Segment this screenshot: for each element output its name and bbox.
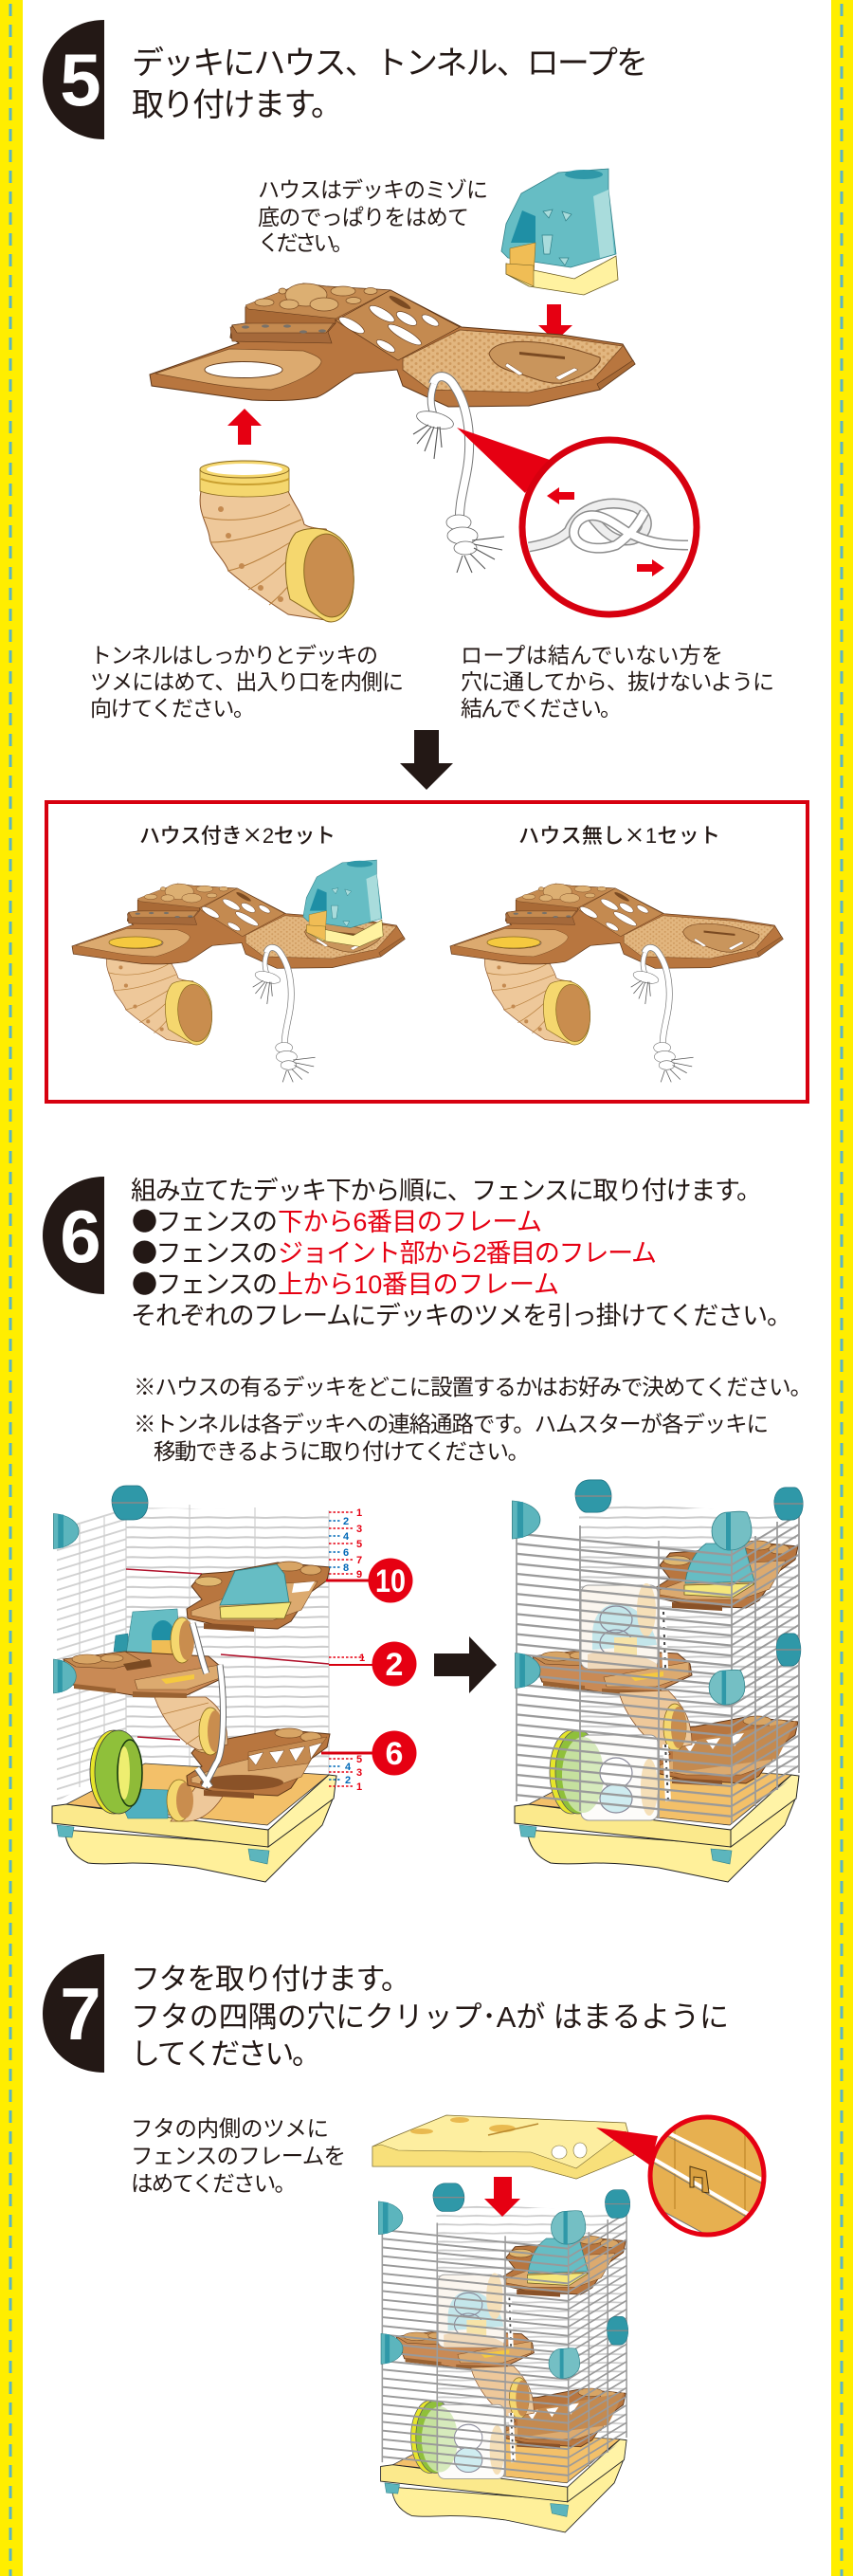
panel: assembled deck sets bbox=[46, 802, 808, 1102]
lower deck bbox=[187, 1728, 330, 1799]
frame number ticks upper: 9 bbox=[356, 1569, 362, 1580]
step 7 number badge bbox=[43, 1954, 104, 2073]
tunnel instruction text: トンネルはしっかりとデッキの bbox=[90, 643, 378, 667]
notes: ※トンネルは各デッキへの連絡通路です。ハムスターが各デッキに bbox=[134, 1412, 769, 1436]
upper tunnel mouth bbox=[171, 1617, 194, 1663]
deck set without house bbox=[450, 884, 783, 1082]
middle level house bbox=[114, 1609, 180, 1659]
step 5 number badge bbox=[43, 20, 104, 139]
icon: house bbox=[501, 169, 618, 295]
cage diagram: before bbox=[52, 1486, 417, 1882]
arrow: red down to cage bbox=[484, 2177, 520, 2217]
frame number ticks upper: 3 bbox=[356, 1524, 362, 1535]
ropes highlight bbox=[192, 1623, 223, 1787]
right dashed yellow border bbox=[831, 0, 853, 2576]
frame number ticks upper: 1 bbox=[356, 1507, 362, 1519]
step 6 instructions: ジョイント部から2番目のフレーム bbox=[278, 1239, 657, 1268]
house instruction text: ください。 bbox=[258, 230, 354, 255]
frame number ticks upper: 2 bbox=[345, 1775, 351, 1786]
rope instruction text: ロープは結んでいない方を bbox=[461, 643, 723, 667]
fence back and side panels bbox=[57, 1505, 329, 1801]
step 5 heading: デッキにハウス、トンネル、ロープを bbox=[132, 46, 648, 82]
notes bbox=[134, 1375, 812, 1464]
badge: 10th frame bbox=[326, 1559, 413, 1602]
step 6 instructions: 組み立てたデッキ下から順に、フェンスに取り付けます。 bbox=[131, 1177, 762, 1205]
frame number ticks upper: 6 bbox=[343, 1547, 349, 1559]
step 7 heading: フタの四隅の穴にクリップ･Aが はまるように bbox=[131, 2001, 729, 2034]
deck illustration bbox=[150, 283, 635, 407]
notes: ※ハウスの有るデッキをどこに設置するかはお好みで決めてください。 bbox=[134, 1375, 812, 1399]
tunnel instruction text: ツメにはめて、出入り口を内側に bbox=[90, 669, 404, 694]
step 6 number badge: 6 bbox=[60, 1195, 101, 1278]
frame number ticks upper: 8 bbox=[343, 1562, 349, 1574]
ropes bbox=[192, 1623, 223, 1787]
house instruction text: ハウスはデッキのミゾに bbox=[258, 177, 488, 202]
frame number ticks upper: 4 bbox=[345, 1762, 352, 1773]
step 5 number badge: 5 bbox=[60, 38, 101, 121]
frame number ticks upper bbox=[329, 1507, 365, 1793]
step 6 instructions: ●フェンスの bbox=[132, 1201, 278, 1238]
step 6 instructions bbox=[131, 1177, 792, 1330]
lid illustration bbox=[372, 2115, 634, 2179]
top deck with house bbox=[187, 1562, 330, 1632]
step 7 heading: してください。 bbox=[131, 2037, 321, 2071]
frame number ticks upper: 5 bbox=[356, 1754, 362, 1765]
frame number ticks upper: 4 bbox=[343, 1531, 350, 1543]
frame number ticks upper: 7 bbox=[356, 1555, 362, 1566]
cage diagram: after bbox=[512, 1480, 803, 1882]
badge: 10th frame: 10 bbox=[375, 1563, 406, 1599]
badge: 2nd frame bbox=[329, 1642, 417, 1686]
step 6 instructions: 上から10番目のフレーム bbox=[278, 1270, 559, 1299]
step 7 number badge: 7 bbox=[60, 1972, 101, 2055]
badge: 6th frame bbox=[321, 1731, 417, 1775]
rope instruction text: 結んでください。 bbox=[461, 696, 622, 721]
frame number ticks upper: 1 bbox=[359, 1653, 365, 1664]
step 6 panel bbox=[43, 1177, 812, 1882]
house instruction text bbox=[258, 177, 488, 255]
lid instruction text bbox=[131, 2116, 346, 2196]
step 7 heading bbox=[131, 1963, 729, 2071]
lower tunnel bbox=[167, 1780, 227, 1821]
house instruction text: 底のでっぱりをはめて bbox=[258, 205, 469, 229]
step 6 instructions: ●フェンスの bbox=[132, 1233, 278, 1270]
base tray bbox=[52, 1763, 336, 1882]
callout: lid clip detail bbox=[596, 2114, 766, 2238]
tunnel instruction text bbox=[90, 643, 404, 721]
arrow: black down to result bbox=[400, 730, 453, 790]
middle deck bbox=[64, 1652, 223, 1698]
tunnel illustration bbox=[200, 461, 357, 622]
badge: 2nd frame: 2 bbox=[386, 1647, 403, 1683]
middle tunnel bbox=[154, 1697, 227, 1755]
deck set with house bbox=[72, 860, 405, 1082]
wheel and feeder bbox=[90, 1730, 168, 1818]
tunnel instruction text: 向けてください。 bbox=[90, 696, 255, 721]
step 6 number badge bbox=[43, 1177, 104, 1294]
rope instruction text bbox=[461, 643, 774, 721]
frame number ticks upper: 5 bbox=[356, 1539, 362, 1550]
frame marker lines bbox=[126, 1569, 329, 1740]
step 5 panel bbox=[43, 20, 774, 790]
callout: rope knot detail bbox=[457, 428, 697, 614]
step 7 heading: フタを取り付けます。 bbox=[131, 1963, 410, 1996]
label: with house: ハウス付き×2セット bbox=[139, 819, 336, 850]
rope illustration bbox=[413, 376, 504, 573]
step 6 instructions: 下から6番目のフレーム bbox=[278, 1208, 542, 1236]
left dashed yellow border bbox=[0, 0, 23, 2576]
arrow: red up from tunnel bbox=[227, 409, 262, 445]
rope instruction text: 穴に通してから、抜けないように bbox=[461, 669, 774, 694]
frame number ticks upper: 1 bbox=[356, 1781, 362, 1793]
step 6 instructions: それぞれのフレームにデッキのツメを引っ掛けてください。 bbox=[131, 1302, 792, 1330]
frame number ticks upper: 3 bbox=[356, 1767, 362, 1779]
label: without house: ハウス無し×1セット bbox=[518, 819, 720, 850]
arrow: red down to deck bbox=[538, 304, 572, 341]
frame number ticks upper: 2 bbox=[343, 1516, 349, 1527]
cage with lid being fitted bbox=[378, 2183, 630, 2532]
lid instruction text: はめてください。 bbox=[131, 2171, 297, 2196]
notes: 移動できるように取り付けてください。 bbox=[154, 1439, 530, 1464]
step 6 instructions: ●フェンスの bbox=[132, 1264, 278, 1301]
step 5 heading: 取り付けます。 bbox=[132, 87, 343, 123]
lid instruction text: フタの内側のツメに bbox=[131, 2116, 329, 2141]
corner clips bbox=[53, 1486, 148, 1693]
lid instruction text: フェンスのフレームを bbox=[131, 2144, 346, 2168]
step 5 heading bbox=[132, 46, 648, 123]
badge: 6th frame: 6 bbox=[386, 1736, 403, 1772]
step 7 panel bbox=[43, 1954, 764, 2532]
arrow: before to after bbox=[434, 1636, 497, 1693]
